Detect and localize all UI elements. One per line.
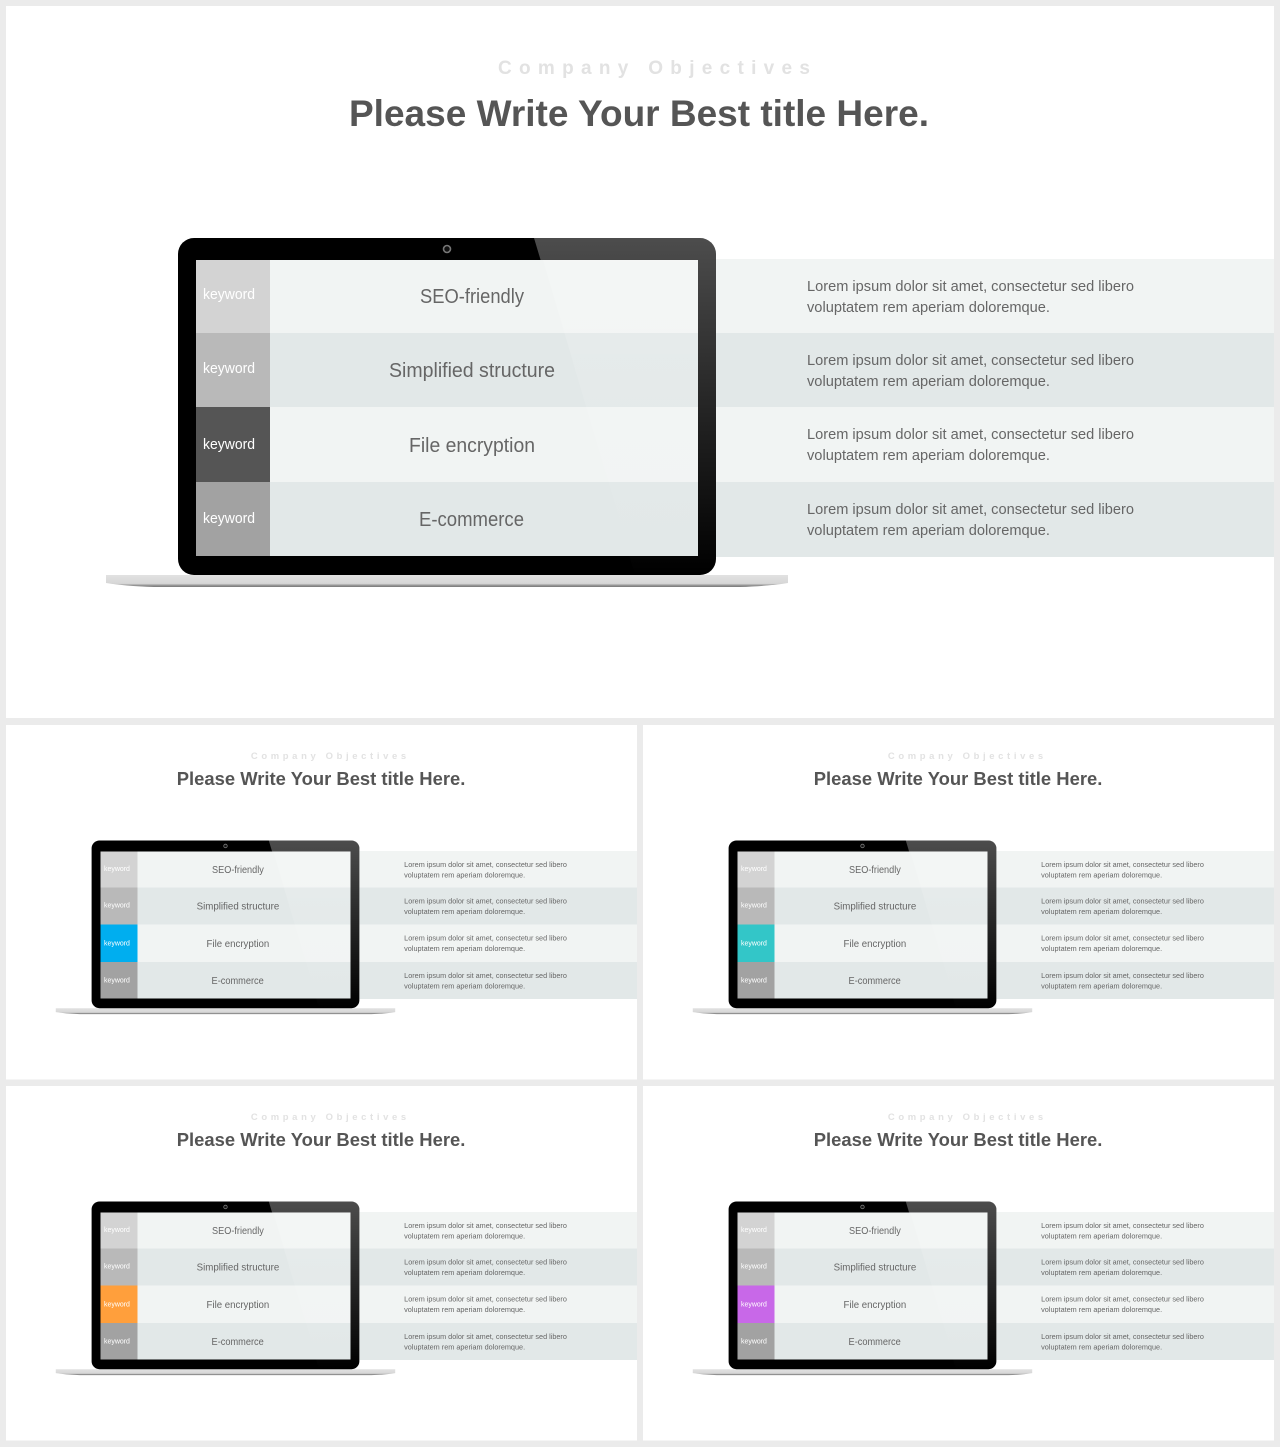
laptop screen [101, 1212, 350, 1360]
description text: voluptatem rem aperiam doloremque. [404, 870, 525, 879]
description text: Lorem ipsum dolor sit amet, consectetur sed libero [404, 1332, 567, 1341]
laptop screen [196, 260, 698, 556]
screen glare [273, 1212, 350, 1360]
laptop screen: File encryption [409, 435, 535, 457]
description text: Lorem ipsum dolor sit amet, consectetur sed libero [807, 278, 1134, 295]
description text: voluptatem rem aperiam doloremque. [1041, 907, 1162, 916]
laptop screen: SEO-friendly [849, 1226, 901, 1237]
bezel glare [906, 840, 996, 1008]
laptop screen: keyword [741, 1299, 767, 1308]
description text: Lorem ipsum dolor sit amet, consectetur sed libero [404, 1295, 567, 1304]
description text: voluptatem rem aperiam doloremque. [807, 447, 1050, 464]
laptop screen: Simplified structure [197, 1263, 280, 1274]
description text: Lorem ipsum dolor sit amet, consectetur sed libero [807, 352, 1134, 369]
description text: voluptatem rem aperiam doloremque. [807, 522, 1050, 539]
laptop screen: SEO-friendly [849, 865, 901, 876]
panel: blue variant [6, 725, 637, 1079]
laptop base [693, 1369, 1032, 1375]
laptop screen: keyword [741, 901, 767, 910]
bezel glare [534, 238, 716, 575]
laptop screen: keyword [203, 436, 255, 453]
laptop screen: E-commerce [212, 1337, 264, 1348]
laptop screen: SEO-friendly [212, 865, 264, 876]
description text: Lorem ipsum dolor sit amet, consectetur sed libero [1041, 971, 1204, 980]
title: Please Write Your Best title Here. [814, 768, 1102, 789]
description text: Lorem ipsum dolor sit amet, consectetur sed libero [1041, 1332, 1204, 1341]
screen glare [273, 851, 350, 999]
panel: teal variant [643, 725, 1274, 1079]
description text: Lorem ipsum dolor sit amet, consectetur sed libero [1041, 860, 1204, 869]
eyebrow heading: Company Objectives [498, 58, 810, 79]
description text: voluptatem rem aperiam doloremque. [1041, 1305, 1162, 1314]
description text: Lorem ipsum dolor sit amet, consectetur sed libero [1041, 897, 1204, 906]
description text [404, 860, 567, 990]
laptop screen: Simplified structure [834, 1263, 917, 1274]
laptop screen: keyword [104, 1225, 130, 1234]
laptop screen: keyword [104, 901, 130, 910]
panel: main slide [6, 6, 1274, 718]
description text: voluptatem rem aperiam doloremque. [404, 981, 525, 990]
description text: Lorem ipsum dolor sit amet, consectetur sed libero [1041, 1258, 1204, 1267]
laptop screen [101, 851, 350, 999]
description strips [359, 1212, 637, 1360]
description text: voluptatem rem aperiam doloremque. [1041, 1231, 1162, 1240]
laptop screen: keyword [104, 1262, 130, 1271]
description text: voluptatem rem aperiam doloremque. [1041, 981, 1162, 990]
laptop screen: keyword [104, 938, 130, 947]
description text: voluptatem rem aperiam doloremque. [807, 299, 1050, 316]
laptop body [729, 1201, 996, 1369]
screen glare [543, 260, 698, 556]
bezel glare [269, 840, 359, 1008]
laptop screen: SEO-friendly [212, 1226, 264, 1237]
description text [1041, 1221, 1204, 1351]
panel: orange variant [6, 1086, 637, 1440]
description text [807, 278, 1134, 539]
description text: Lorem ipsum dolor sit amet, consectetur sed libero [404, 971, 567, 980]
title: Please Write Your Best title Here. [177, 1129, 465, 1150]
screen glare [910, 1212, 987, 1360]
laptop screen: keyword [203, 510, 255, 527]
description text: voluptatem rem aperiam doloremque. [1041, 870, 1162, 879]
description text: Lorem ipsum dolor sit amet, consectetur sed libero [1041, 1221, 1204, 1230]
laptop screen: keyword [104, 1299, 130, 1308]
description text: voluptatem rem aperiam doloremque. [404, 1342, 525, 1351]
title: Please Write Your Best title Here. [349, 93, 929, 134]
description strips [716, 259, 1274, 557]
description text: voluptatem rem aperiam doloremque. [404, 1305, 525, 1314]
description text: Lorem ipsum dolor sit amet, consectetur sed libero [404, 860, 567, 869]
laptop screen: E-commerce [849, 1337, 901, 1348]
laptop body [729, 840, 996, 1008]
title: Please Write Your Best title Here. [177, 768, 465, 789]
camera [861, 844, 864, 848]
description text: Lorem ipsum dolor sit amet, consectetur sed libero [1041, 934, 1204, 943]
laptop screen: E-commerce [212, 976, 264, 987]
description text: voluptatem rem aperiam doloremque. [807, 373, 1050, 390]
description text: Lorem ipsum dolor sit amet, consectetur sed libero [807, 426, 1134, 443]
laptop screen: keyword [741, 864, 767, 873]
description text: Lorem ipsum dolor sit amet, consectetur sed libero [807, 501, 1134, 518]
description text: voluptatem rem aperiam doloremque. [404, 944, 525, 953]
laptop screen: File encryption [844, 939, 906, 950]
description strips [996, 851, 1274, 999]
laptop screen: File encryption [207, 939, 269, 950]
laptop screen [738, 851, 987, 999]
laptop screen: Simplified structure [389, 360, 555, 382]
laptop body [92, 840, 359, 1008]
description text: Lorem ipsum dolor sit amet, consectetur sed libero [404, 1258, 567, 1267]
laptop screen: keyword [741, 1336, 767, 1345]
description strips [359, 851, 637, 999]
laptop screen: E-commerce [419, 509, 524, 531]
bezel glare [906, 1201, 996, 1369]
laptop screen: keyword [104, 1336, 130, 1345]
laptop body [92, 1201, 359, 1369]
laptop body [178, 238, 716, 575]
camera [224, 1205, 227, 1209]
laptop screen: keyword [741, 1262, 767, 1271]
laptop screen: keyword [741, 975, 767, 984]
laptop screen: Simplified structure [834, 902, 917, 913]
description text [404, 1221, 567, 1351]
laptop screen: keyword [741, 938, 767, 947]
eyebrow heading: Company Objectives [888, 1112, 1043, 1123]
panel: purple variant [643, 1086, 1274, 1440]
title: Please Write Your Best title Here. [814, 1129, 1102, 1150]
eyebrow heading: Company Objectives [251, 1112, 406, 1123]
description text: voluptatem rem aperiam doloremque. [1041, 944, 1162, 953]
laptop screen: File encryption [844, 1300, 906, 1311]
laptop base [693, 1008, 1032, 1014]
description text: Lorem ipsum dolor sit amet, consectetur sed libero [404, 1221, 567, 1230]
description text: voluptatem rem aperiam doloremque. [404, 907, 525, 916]
eyebrow heading: Company Objectives [888, 751, 1043, 762]
laptop screen: SEO-friendly [420, 286, 524, 308]
bezel glare [269, 1201, 359, 1369]
description strips [996, 1212, 1274, 1360]
description text: voluptatem rem aperiam doloremque. [404, 1268, 525, 1277]
camera [224, 844, 227, 848]
description text: Lorem ipsum dolor sit amet, consectetur sed libero [404, 897, 567, 906]
description text [1041, 860, 1204, 990]
laptop screen: Simplified structure [197, 902, 280, 913]
description text: voluptatem rem aperiam doloremque. [404, 1231, 525, 1240]
laptop screen: keyword [203, 286, 255, 303]
laptop screen: E-commerce [849, 976, 901, 987]
description text: Lorem ipsum dolor sit amet, consectetur sed libero [404, 934, 567, 943]
laptop screen: keyword [104, 864, 130, 873]
laptop base [56, 1369, 395, 1375]
laptop base [106, 575, 788, 587]
description text: voluptatem rem aperiam doloremque. [1041, 1268, 1162, 1277]
laptop screen: File encryption [207, 1300, 269, 1311]
camera [444, 246, 450, 252]
laptop screen [738, 1212, 987, 1360]
laptop screen: keyword [104, 975, 130, 984]
eyebrow heading: Company Objectives [251, 751, 406, 762]
laptop screen: keyword [203, 360, 255, 377]
laptop screen: keyword [741, 1225, 767, 1234]
laptop base [56, 1008, 395, 1014]
camera [861, 1205, 864, 1209]
description text: voluptatem rem aperiam doloremque. [1041, 1342, 1162, 1351]
screen glare [910, 851, 987, 999]
description text: Lorem ipsum dolor sit amet, consectetur sed libero [1041, 1295, 1204, 1304]
